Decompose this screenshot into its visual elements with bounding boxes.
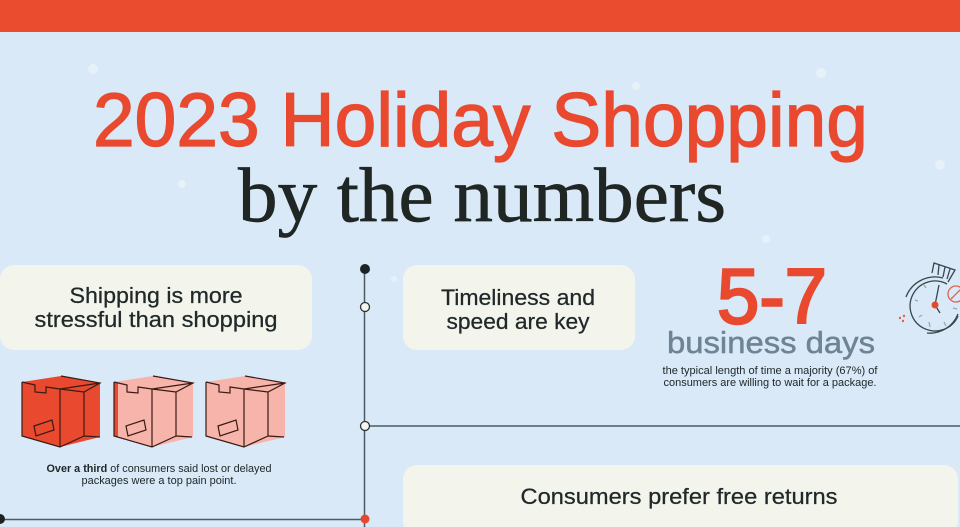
panel: shipping stress: stressful than shopping <box>34 307 278 332</box>
stat: 5-7 business days: the typical length of time a majority (67%) of <box>662 365 878 377</box>
title: by the numbers <box>238 152 726 238</box>
icon: light package 1 <box>114 376 193 447</box>
stat: 5-7 business days: business days <box>667 325 875 360</box>
panel: free returns: Consumers prefer free returns <box>520 484 838 509</box>
caption: packages <box>46 463 272 487</box>
panel: timeliness: Timeliness and <box>441 285 595 310</box>
title <box>93 78 868 238</box>
title: 2023 Holiday Shopping <box>93 78 868 163</box>
stat: 5-7 business days <box>662 252 878 389</box>
timeline nodes <box>0 264 370 524</box>
icon: stopwatch <box>899 263 960 333</box>
stat: 5-7 business days: consumers are willing to wait for a package. <box>664 377 876 389</box>
panel: timeliness: speed are key <box>446 309 590 334</box>
stat: 5-7 business days: 5-7 <box>717 252 827 340</box>
top banner <box>0 0 960 32</box>
icon: light package 2 <box>206 376 285 447</box>
panel: shipping stress: Shipping is more <box>70 283 242 308</box>
caption: packages: packages were a top pain point. <box>82 475 236 487</box>
panel: shipping stress <box>0 265 312 350</box>
timeline connectors <box>0 269 960 527</box>
icon: red package <box>22 376 100 447</box>
panel: free returns <box>403 465 958 527</box>
caption: packages: Over a third of consumers said lost or delayed <box>46 463 272 475</box>
panel: timeliness <box>403 265 635 350</box>
